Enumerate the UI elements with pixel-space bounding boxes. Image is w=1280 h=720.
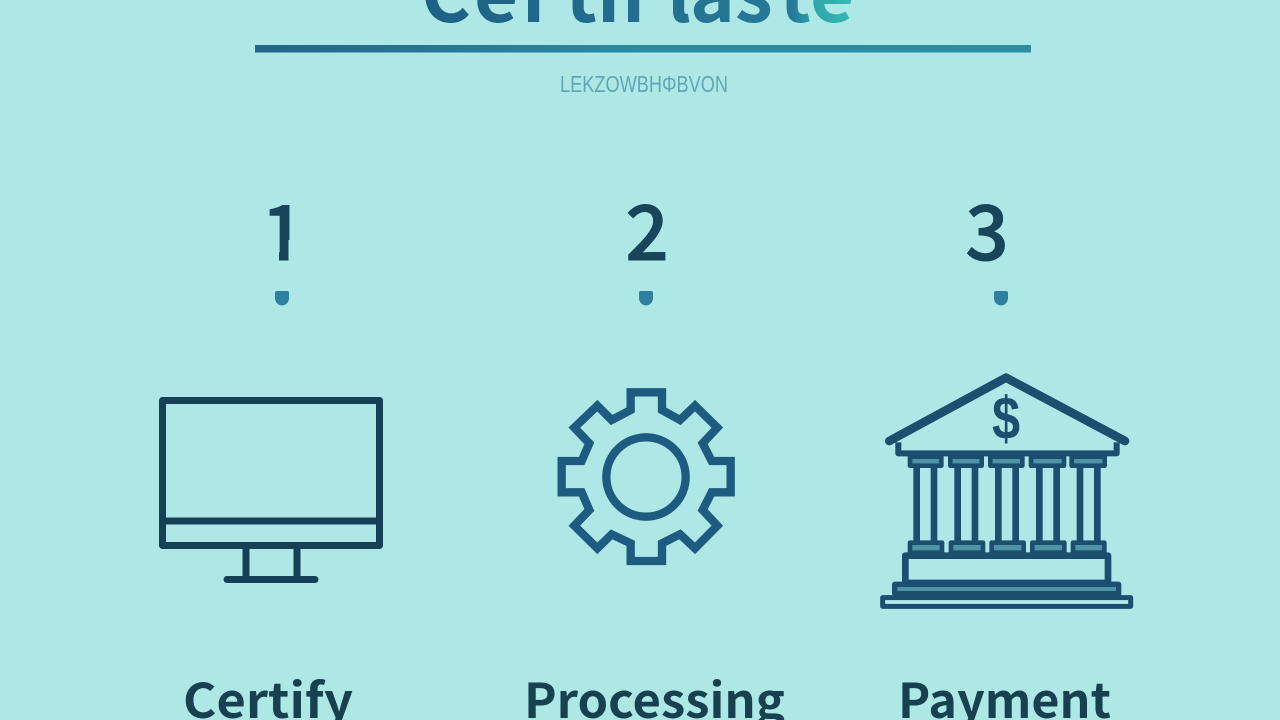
dollar sign: $ <box>992 385 1020 452</box>
icon: computer monitor <box>162 400 380 580</box>
icon: bank building <box>883 378 1131 606</box>
step number 3: 3 <box>965 172 1009 282</box>
title underline <box>255 45 1031 52</box>
step marker 3 <box>994 291 1008 306</box>
step number 2: 2 <box>625 172 669 282</box>
step marker 2 <box>639 291 653 306</box>
step number 1: 1 <box>261 172 305 282</box>
subtitle: LEKZOWBHΦBVON <box>560 71 728 97</box>
step marker 1 <box>275 291 289 306</box>
icon: gear <box>562 392 731 561</box>
